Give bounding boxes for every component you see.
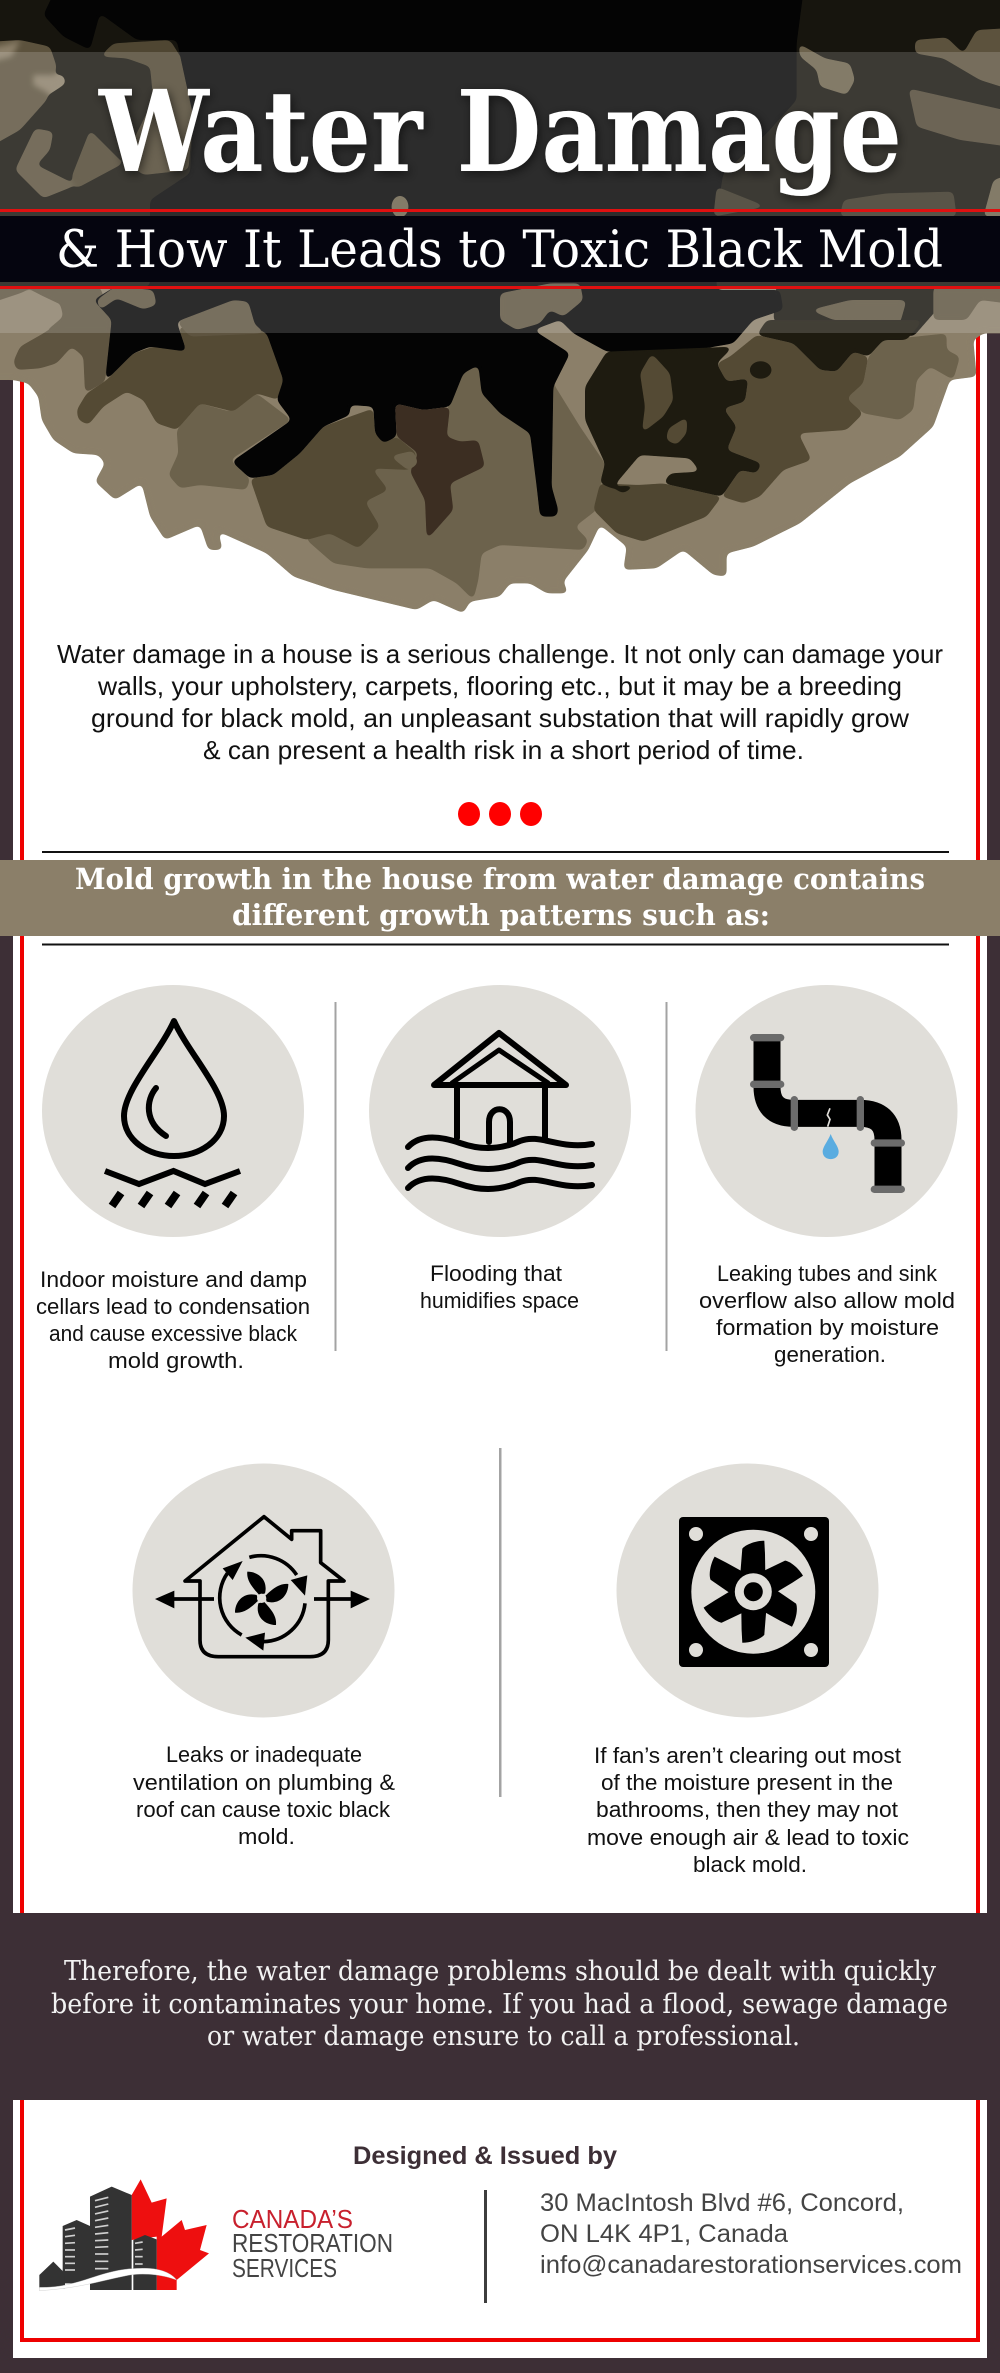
small lobe by brown patch [390, 451, 418, 471]
caption 2: humidifies space [420, 1288, 579, 1313]
caption 5: If fan’s aren’t clearing out most [594, 1743, 901, 1768]
footer heading: Designed & Issued by [353, 2142, 617, 2170]
three red dots [458, 802, 542, 826]
red rule above subtitle [0, 209, 1000, 212]
caption 5 [587, 1743, 909, 1877]
patches over the black mass [97, 195, 583, 337]
caption 2 [420, 1261, 579, 1313]
logo wordmark: SERVICES [232, 2253, 337, 2283]
intro paragraph: ground for black mold, an unpleasant substation that will rapidly grow [91, 703, 909, 733]
item 2: flooding [369, 985, 631, 1313]
caption 1: Indoor moisture and damp [40, 1267, 307, 1292]
caption 4 [133, 1742, 395, 1849]
intro paragraph: Water damage in a house is a serious challenge. It not only can damage your [57, 639, 943, 669]
section banner: Mold growth in the house from water damage contains [75, 862, 925, 896]
subtitle: & How It Leads to Toxic Black Mold [56, 221, 943, 280]
icon: house ventilation [132, 1464, 394, 1718]
mold blob illustration [0, 0, 1000, 613]
intro paragraph: & can present a health risk in a short period of time. [203, 735, 804, 765]
logo: Canada's Restoration Services [39, 2179, 393, 2291]
red rule below subtitle [0, 286, 1000, 289]
left lower mid lobe [0, 283, 112, 393]
conclusion band: or water damage ensure to call a professional. [207, 2021, 800, 2052]
icon: square fan [616, 1464, 878, 1718]
caption 4: roof can cause toxic black [136, 1797, 391, 1822]
caption 1: and cause excessive black [49, 1321, 298, 1346]
contact details: 30 MacIntosh Blvd #6, Concord, [540, 2189, 904, 2217]
inner brown streaks [640, 353, 687, 445]
logo wordmark: RESTORATION [232, 2228, 393, 2258]
caption 1: cellars lead to condensation [36, 1294, 310, 1319]
upper right band patches [713, 27, 1000, 323]
icon: flooded house [369, 985, 631, 1237]
top shadow layer [0, 0, 1000, 287]
logo wordmark: CANADA’S [232, 2204, 353, 2234]
conclusion band: Therefore, the water damage problems should be dealt with quickly [64, 1956, 937, 1987]
item 3: leaking pipe [696, 985, 958, 1367]
item 4: ventilation [132, 1464, 395, 1849]
black central mass [43, 0, 805, 517]
base tan layer [0, 0, 1000, 613]
contact details: info@canadarestorationservices.com [540, 2251, 962, 2279]
caption 5: of the moisture present in the [601, 1770, 893, 1795]
translucent title band [0, 52, 1000, 333]
caption 3: formation by moisture [716, 1315, 939, 1340]
section banner [0, 860, 1000, 936]
caption 3: Leaking tubes and sink [717, 1261, 938, 1286]
contact details: ON L4K 4P1, Canada [540, 2220, 788, 2248]
caption 1 [36, 1267, 310, 1373]
intro paragraph: walls, your upholstery, carpets, flooring etc., but it may be a breeding [97, 671, 902, 701]
item 5: bathroom fan [587, 1464, 909, 1877]
title: Water Damage [98, 67, 902, 198]
caption 4: Leaks or inadequate [166, 1742, 362, 1767]
icon: water drop on surface [42, 985, 304, 1237]
subtitle band [0, 216, 1000, 282]
caption 3: overflow also allow mold [699, 1288, 955, 1313]
caption 2: Flooding that [430, 1261, 562, 1286]
caption 5: move enough air & lead to toxic [587, 1825, 909, 1850]
caption 4: ventilation on plumbing & [133, 1770, 395, 1795]
intro paragraph [57, 639, 943, 765]
section banner: different growth patterns such as: [232, 898, 770, 932]
caption 3: generation. [774, 1342, 886, 1367]
left upper band patches [0, 40, 193, 333]
contact details [540, 2189, 962, 2279]
darkest olive layer [585, 320, 923, 497]
conclusion band: before it contaminates your home. If you had a flood, sewage damage [51, 1989, 948, 2020]
brown centre patch [395, 403, 485, 540]
caption 5: black mold. [693, 1852, 807, 1877]
item 1: condensation [36, 985, 310, 1373]
logo mark [39, 2179, 209, 2291]
caption 4: mold. [238, 1824, 295, 1849]
caption 3 [699, 1261, 955, 1367]
caption 5: bathrooms, then they may not [596, 1797, 898, 1822]
icon: leaking pipe [696, 985, 958, 1237]
conclusion band [0, 1913, 1000, 2100]
dark brown layer [77, 327, 868, 548]
mid-tone layer, lower centre and right [168, 333, 960, 600]
logo wordmark [232, 2204, 393, 2283]
caption 1: mold growth. [108, 1348, 244, 1373]
lower right olive patch [773, 283, 937, 337]
